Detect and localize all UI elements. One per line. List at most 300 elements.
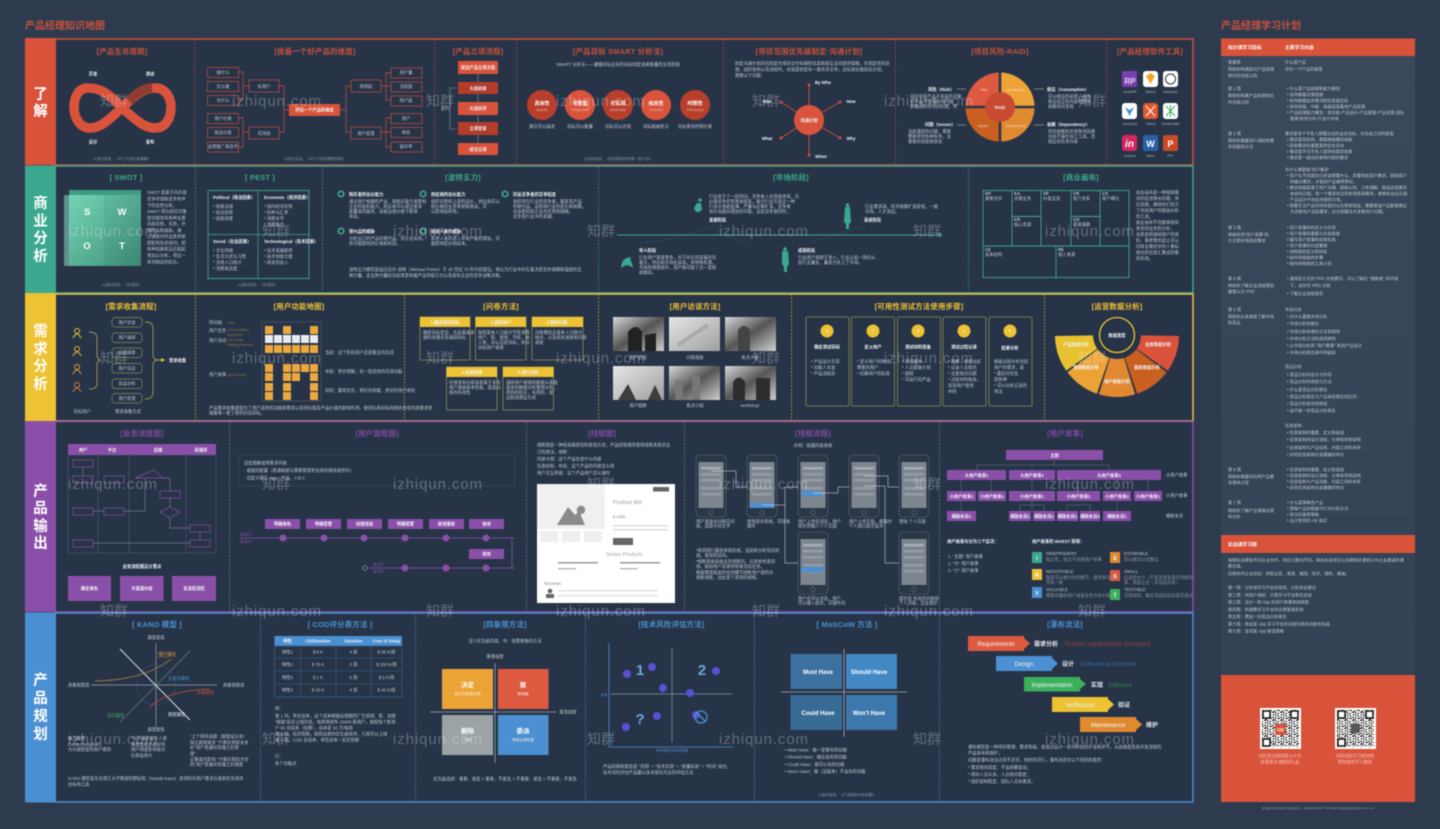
icons: software tools: Mockplus bbox=[1123, 122, 1137, 126]
panel: study plan table: • 信息架构的重要、定义和组成 bbox=[1287, 429, 1344, 436]
cards: usability steps: 2 bbox=[872, 328, 875, 334]
flow: demand collection: 问卷调查 bbox=[118, 349, 136, 356]
tree: user story: 小用户故事 bbox=[1166, 492, 1188, 499]
watermarks: 知群 bbox=[100, 350, 128, 366]
heading: demand collection: [需求收集流程] bbox=[106, 302, 157, 311]
chart: infinity lifecycle bbox=[74, 70, 171, 161]
panel: study plan table: 和分析 bbox=[1228, 513, 1241, 520]
flow: demand collection: 用户调研 bbox=[118, 334, 136, 341]
panel: 产品输出 row: 品 bbox=[33, 501, 48, 517]
diagram: business canvas: 渠道通路 bbox=[1073, 221, 1091, 228]
chart: RAID wheel: Issues bbox=[978, 124, 988, 128]
flow: demand collection: 用户访谈 bbox=[118, 319, 136, 326]
diagram: communication plan: What bbox=[762, 136, 773, 141]
list: five forces: 手段。 bbox=[349, 213, 362, 220]
panel: study plan table: 本质的过程。找一个需求的达到有效提高需求，能够机会在后面 bbox=[1290, 190, 1407, 197]
diagram: user journey: 使用 bbox=[482, 520, 491, 528]
matrix: PEST: * 消费者态度 bbox=[213, 265, 238, 272]
chart: eisenhower quadrant bbox=[430, 638, 577, 782]
table: COD: 行： bbox=[275, 753, 284, 760]
heading: PEST: [ PEST ] bbox=[245, 173, 275, 182]
chart: waterfall: 设计 bbox=[1062, 660, 1074, 668]
watermarks: izhiqun.com bbox=[719, 476, 809, 493]
flow: project setup: 立项答审 bbox=[469, 125, 487, 132]
cards: survey: 1.确定调研目标 bbox=[430, 319, 460, 326]
chart: eisenhower quadrant: 优先级选择：重要、紧急 > 重要、不紧急 > 不重要、紧急 > 不重要、不紧急 bbox=[433, 776, 577, 782]
tree: user story: 小用户故事1 bbox=[1067, 493, 1091, 500]
panel: study plan table: • 竞品分析报告与产品体验报告的区别 bbox=[1287, 393, 1357, 400]
list: five forces: 质量高的服务，或者迫使价格下跌等 bbox=[349, 208, 418, 215]
heading: ops: [运营数据分析] bbox=[1092, 302, 1143, 311]
panel: study plan table: • 市场分析方法的选用原则 bbox=[1287, 335, 1336, 342]
title: study plan: 产品经理学习计划 bbox=[1221, 19, 1301, 32]
chart: user story map: 时间轴 bbox=[209, 319, 222, 326]
heading: scope: [项目范围优先级制定·沟通计划] bbox=[756, 47, 863, 56]
panel: study plan table bbox=[1221, 38, 1415, 676]
chart: waterfall: 实现 bbox=[1091, 681, 1103, 689]
diagram: business canvas: 同样业模式中的人重标 bbox=[1136, 243, 1180, 250]
chart: waterfall: * 组织架构稳定、团队人员有要求。 bbox=[968, 778, 1035, 785]
wireflow phones: 可以输入提示，可操作内 bbox=[798, 600, 845, 606]
panel: 需求分析 row: 求 bbox=[33, 340, 48, 358]
watermarks: izhiqun.com bbox=[232, 603, 322, 620]
panel: study plan table: 第 2 周 bbox=[1228, 130, 1241, 137]
diagram: business flow: 前端序 bbox=[195, 446, 208, 454]
watermarks: 知群 bbox=[262, 223, 290, 239]
chart: eisenhower quadrant: 做 bbox=[520, 680, 527, 689]
heading: market: [市场阶段] bbox=[773, 173, 809, 182]
diagram: business flow: 用户 bbox=[79, 446, 87, 454]
matrix: SWOT: 各种因素相互匹配起 bbox=[147, 246, 186, 252]
chart: market stages: 市场，人才流出。 bbox=[865, 208, 899, 215]
flow: demand collection: 用户反馈 bbox=[118, 395, 136, 402]
table: COD: $ 5 K bbox=[313, 650, 323, 654]
panel: 商业分析 row: 析 bbox=[33, 247, 48, 265]
diagram: business canvas: 待的促进增长的图，用 bbox=[1136, 195, 1179, 202]
cards: survey: 2.选定用户 bbox=[491, 319, 511, 326]
list: five forces: 能影响定价和成本。 bbox=[431, 240, 470, 247]
table: COD: 特性2 bbox=[282, 661, 294, 668]
heading: good product: [做最一个好产品的维度] bbox=[274, 47, 356, 56]
list: five forces bbox=[338, 191, 586, 279]
wireframe card: Product title bbox=[613, 500, 642, 506]
panel: study plan table: • 线框图的定义和特征 bbox=[1287, 248, 1328, 255]
chart: market stages: 成熟阶段 bbox=[798, 247, 816, 254]
chart: SMART circles: 以目标制定、《如何规划你的第一份产品》 bbox=[584, 156, 652, 161]
photos: interview: 问卷调查 bbox=[686, 354, 704, 361]
watermarks: 知群 bbox=[752, 93, 780, 109]
chart: KANO: 魅力属性 bbox=[159, 651, 177, 658]
matrix: SWOT: 以迭代研究、《开发性》 bbox=[102, 282, 142, 287]
matrix: PEST: * 生活方式与习惯 bbox=[213, 253, 247, 260]
chart: MoSCoW: • Won't Have：做（这版本）不会有的功能 bbox=[785, 768, 866, 775]
chart: KANO: 满意度低 bbox=[147, 726, 165, 733]
panel: study plan table: 往期合作企业包括：网易云音、滴滴、美团、知乎、猎豹、美柚。 bbox=[1228, 570, 1349, 577]
panel: study plan table: 产品设计中创出合理的方案。 bbox=[1290, 196, 1344, 203]
table: COD: 2 周 bbox=[350, 662, 357, 668]
diagram: business canvas: 收入来源 bbox=[1058, 251, 1076, 258]
chart: market stages: 行业需求减，经济规模扩张盈低，一般 bbox=[865, 203, 939, 210]
diagram: business canvas: CH bbox=[1073, 217, 1079, 222]
diagram: user journey: 新用户 bbox=[373, 561, 385, 567]
cards: survey: 5.进行分析 bbox=[518, 369, 539, 376]
table: COD: Duration bbox=[345, 638, 363, 644]
matrix: SWOT: 密切相关的各种主要 bbox=[147, 214, 186, 222]
chart: market stages: 些行业量化、量反力优上了市场。 bbox=[798, 259, 862, 266]
flow: project setup: 迭代 bbox=[441, 105, 450, 112]
chart: tech risk: 1 bbox=[636, 662, 644, 679]
diagram: business canvas: VP bbox=[1043, 191, 1049, 196]
wireflow phones: 登陆 个人页面 bbox=[899, 518, 927, 525]
panel: study plan table: 第七周：该项某 App 推送策略 bbox=[1228, 628, 1285, 634]
heading: tools: [产品经理软件工具] bbox=[1117, 47, 1183, 56]
chart: KANO: 满意度越多越好的 bbox=[131, 741, 165, 748]
matrix: SWOT: S bbox=[84, 207, 90, 218]
cards: usability steps: 确定测试目标 bbox=[814, 344, 841, 350]
panel: 产品输出 row: 输 bbox=[33, 517, 48, 535]
flow: project setup bbox=[441, 61, 498, 155]
panel: study plan table: • 市场分析有哪些方法和规则 bbox=[1287, 328, 1340, 335]
chart: RAID wheel: 当前遇到的问题，需要 bbox=[908, 128, 952, 135]
matrix: PEST: * 消费水平 bbox=[264, 215, 285, 222]
panel: 商业分析 row: 商 bbox=[33, 194, 48, 212]
tree: user story: 细致条目4 bbox=[1080, 513, 1100, 520]
chart: SMART circles: SMART 分析法——遵循目标应有的目标制定或者衡量的五项原则 bbox=[556, 61, 680, 68]
chart: user story map: 产品需求收集提取为了用户选择的功能和需求以及团队能及产品价值的影响作用。使团队和目标的相关各项内容需求快 bbox=[209, 404, 433, 412]
tree: user story: 用户故事的 INVEST 原则： bbox=[1032, 538, 1084, 545]
wireframe card: 己的想法。线框： bbox=[537, 448, 571, 456]
watermarks: 知群 bbox=[752, 350, 780, 366]
chart: waterfall: Software architecture bbox=[1080, 662, 1137, 668]
photos: interview: 焦点小组 bbox=[686, 402, 704, 409]
photos: interview: 用户观察 bbox=[629, 402, 647, 409]
panel: study plan table: 知识课学习目标 bbox=[1228, 44, 1262, 51]
watermarks: izhiqun.com bbox=[556, 350, 646, 367]
wireflow phones: 用户直接访问网页内 bbox=[696, 518, 735, 525]
title: knowledge map: 产品经理知识地图 bbox=[25, 19, 105, 32]
diagram: business canvas: 成本结构 bbox=[985, 251, 1003, 258]
wireflow phones bbox=[696, 442, 940, 606]
chart: user story map: Walking Skeleton bbox=[227, 343, 254, 347]
chart: KANO: 缺乏越来越多 "只要好用就多多 bbox=[190, 739, 249, 746]
diagram: good product dimensions: 用户反馈 bbox=[357, 130, 375, 137]
list: five forces: 供应商的议价能力 bbox=[431, 191, 465, 198]
diagram: user journey: 老用户 bbox=[373, 568, 385, 574]
matrix: PEST: * 政治形势 bbox=[213, 209, 234, 216]
diagram: user journey: 明确角色 bbox=[274, 520, 292, 528]
wireframe card: 用户交互界面：这个产品用户怎么操作 bbox=[537, 470, 611, 476]
cards: usability steps: * 最后对优化 bbox=[994, 370, 1019, 377]
diagram: good product dimensions: 留存率 bbox=[400, 143, 413, 150]
diagram: business canvas: 到作用。 bbox=[1136, 255, 1153, 262]
table: COD: 4 周 bbox=[350, 688, 357, 694]
chart: KANO: 魅力属性 bbox=[68, 735, 86, 742]
chart: tech risk: 技术难度/技术成熟度 bbox=[656, 748, 689, 752]
diagram: communication plan: How bbox=[846, 99, 856, 104]
diagram: good product dimensions: 用得起 bbox=[360, 83, 373, 90]
diagram: business canvas: 的工具。 bbox=[1136, 213, 1153, 220]
matrix: PEST: * 技术创新力度 bbox=[264, 253, 293, 260]
panel: study plan table: 第五周：撰出一份竞品分析报告 bbox=[1228, 613, 1287, 620]
table: COD: 第 2 列，延迟周期，按照设想的优先级排序，几周可以上线 bbox=[275, 730, 388, 738]
wireflow phones: 用户上传后浏览，用户 bbox=[798, 518, 841, 525]
panel: study plan table: • 信息架构的设计流程，分单和举例说明 bbox=[1287, 436, 1361, 443]
watermarks: izhiqun.com bbox=[884, 603, 974, 620]
watermarks: 知群 bbox=[100, 603, 128, 619]
chart: KANO: "上个用带成绩（期望成分多） bbox=[190, 733, 247, 740]
diagram: business canvas: R$ bbox=[1058, 247, 1064, 252]
panel: study plan table: • 制作线框图的步骤 bbox=[1287, 254, 1323, 261]
table: COD: Cost of Delay bbox=[373, 638, 401, 644]
tree: user story: 务有一致 bbox=[1046, 579, 1064, 586]
panel: QR footer: 帮你规划学习路径 bbox=[1338, 758, 1373, 766]
chart: waterfall: Software bbox=[1108, 683, 1132, 689]
chart: SMART circles: 时限性 bbox=[687, 100, 703, 107]
panel: study plan table: • 用户故事的重要与全局思维 bbox=[1287, 230, 1340, 237]
tree: user story: 小用户故事1 bbox=[1020, 493, 1045, 500]
cards: survey: 问卷需结合基本人口统计 bbox=[535, 329, 583, 336]
panel: study plan table: 帮助你掌握用户调研和需 bbox=[1228, 137, 1274, 144]
panel: study plan table: • 用户故事的的定义与作用 bbox=[1287, 224, 1336, 231]
matrix: PEST: Social（社会因素） bbox=[213, 238, 251, 245]
tree: user story: SMALL bbox=[1124, 569, 1139, 574]
panel: 产品规划 row bbox=[25, 612, 1193, 802]
chart: eisenhower quadrant: 寻找让他完善 bbox=[512, 737, 534, 742]
wireframe card: Reviews bbox=[544, 581, 562, 586]
chart: tech risk: ? bbox=[635, 711, 645, 728]
panel: study plan table: • 市场分析报告调中到面前 bbox=[1287, 349, 1336, 356]
icons: software tools: Sketch bbox=[1145, 90, 1156, 94]
watermarks: izhiqun.com bbox=[1045, 731, 1135, 748]
panel: study plan table: • 需求挖掘是基于用户沟通、细致认知、人性理解、提出这类需求 bbox=[1287, 184, 1408, 191]
panel: study plan table: • 常见的推荐策略 bbox=[1287, 511, 1320, 518]
chart: waterfall: Product requirements document bbox=[1065, 642, 1151, 648]
panel: 产品规划 row: 规 bbox=[33, 708, 48, 725]
chart: ops fan bbox=[1055, 318, 1179, 397]
heading: tech risk: [技术风险评估方法] bbox=[638, 620, 705, 629]
table: COD: 各个功能点 bbox=[275, 760, 297, 767]
chart: user story map: User Activities bbox=[227, 328, 249, 332]
cards: usability steps: 需要的用户 bbox=[857, 364, 878, 371]
matrix: SWOT: 下的态势分析。 bbox=[147, 202, 177, 209]
cards: usability steps: 结果分析 bbox=[1001, 344, 1019, 352]
chart: RAID wheel: 项目依赖的外部各项因素 bbox=[1048, 128, 1096, 135]
chart: ops fan: 产品数据分析 bbox=[1063, 341, 1090, 348]
cards: survey: 确定目标定位，在此基础关 bbox=[423, 329, 475, 336]
panel: study plan table: • 信息架构与产品功能、内容之间的关系 bbox=[1287, 478, 1361, 485]
table: COD: 特性3 bbox=[282, 674, 294, 681]
chart: waterfall: Implementation bbox=[1031, 683, 1073, 689]
watermarks: 知群 bbox=[587, 731, 615, 747]
watermarks: izhiqun.com bbox=[1045, 223, 1135, 240]
panel: 商业分析 row: 分 bbox=[33, 230, 48, 247]
matrix: SWOT: SWOT 得与研究对象 bbox=[147, 208, 187, 215]
chart: KANO: 记事某的影响 "只要好用的才好 bbox=[190, 756, 249, 763]
panel: study plan table: 大多数用户深层需求，应对很解决大多数用户问题。 bbox=[1290, 208, 1386, 215]
cards: survey: 4.投放回收 bbox=[462, 369, 483, 376]
chart: market stages: 有价也趋向增加的可能，这段竞争激烈时， bbox=[709, 208, 791, 215]
wireflow phones: 线框线框，因此受了适用的线框。 bbox=[696, 574, 760, 581]
cards: usability steps: 5 bbox=[1009, 328, 1012, 334]
heading: user story: [用户故事] bbox=[1047, 429, 1083, 438]
table: COD: 例： bbox=[275, 705, 284, 712]
panel: study plan table: 第 3 周 bbox=[1228, 224, 1241, 231]
chart: market stages: 规模局。 bbox=[639, 269, 656, 276]
panel: 产品规划 row: 产 bbox=[33, 672, 48, 689]
panel: study plan table: 帮助你构建产品经理岗位 bbox=[1228, 92, 1274, 99]
matrix: PEST bbox=[208, 190, 318, 287]
matrix: PEST: * 技术发展趋势 bbox=[264, 247, 293, 254]
diagram: good product dimensions: 商业价值 bbox=[214, 129, 232, 136]
chart: RAID wheel: 可以假设的前提，相关 bbox=[1048, 93, 1092, 100]
diagram: business flow: 平台 bbox=[108, 446, 117, 454]
diagram: communication plan: 沟通计划 bbox=[800, 117, 818, 124]
list: five forces: 种力量，这五种力量综合起来影响着产业的吸引力以及现有企业的竞争战略决策。 bbox=[349, 272, 504, 279]
heading: KANO: [ KANO 模型 ] bbox=[132, 620, 182, 629]
diagram: business flow: 及流程流程 bbox=[183, 585, 205, 592]
tree: user story: TESTABLE bbox=[1124, 587, 1146, 592]
tree: user story: 用户故事可分为三个层次： bbox=[947, 538, 999, 545]
list: five forces: 通过用户规模的产业、和购买能力来影响 bbox=[349, 198, 427, 205]
matrix: PEST: * 当地人口统计 bbox=[213, 259, 242, 266]
chart: tech risk: 产品的限制某些是 "范围" + "技术实现" + "质量标准" + "时间" 组合， bbox=[603, 763, 731, 770]
wireflow phones: 根据需提提高的化的细节线框用户提的分 bbox=[696, 569, 774, 576]
icons: software tools: RP bbox=[1124, 77, 1136, 86]
list: five forces: 波特五力模型是由迈克尔·波特（Michael Porter）于 20 世纪 70 年代初提出。他认为行业中存在着决定竞争规模和强度的五 bbox=[349, 266, 582, 273]
watermarks: izhiqun.com bbox=[68, 476, 158, 493]
diagram: business canvas: 更多的业务的分析， bbox=[1136, 225, 1175, 232]
cards: usability steps: 用户的需求，提 bbox=[994, 364, 1025, 371]
watermarks: izhiqun.com bbox=[884, 350, 974, 367]
diagram: business canvas: 商业画布不仅能够很有 bbox=[1136, 219, 1180, 226]
panel: study plan table: • 制作线框图的工具介绍 bbox=[1287, 260, 1332, 267]
flow: project setup: 大组初评 bbox=[469, 105, 487, 112]
panel: study plan table: • 需求是用性的，需要根据需的调查 bbox=[1287, 136, 1353, 143]
icons: software tools: XMind bbox=[1146, 122, 1155, 126]
diagram: business canvas: CR bbox=[1073, 191, 1080, 196]
panel: study plan table: 求挖掘的方法 bbox=[1228, 143, 1253, 150]
diagram: business canvas: 重要合作 bbox=[985, 195, 1003, 202]
list: five forces: 分析自己的产品的替代品，对企业有利。 bbox=[349, 235, 426, 242]
heading: project setup: [产品立项流程] bbox=[453, 47, 504, 56]
chart: infinity lifecycle: 设计 bbox=[89, 138, 98, 146]
table: COD: $ 40 K/周 bbox=[378, 688, 395, 694]
cards: survey bbox=[420, 317, 587, 410]
watermarks: 知群 bbox=[100, 93, 128, 109]
tree: user story: S bbox=[1113, 574, 1117, 580]
chart: waterfall: Maintenance bbox=[1091, 723, 1126, 729]
cards: survey: 入等，对以自定目标，并分 bbox=[478, 339, 530, 346]
panel: study plan table: 的全面认知 bbox=[1228, 98, 1249, 106]
heading: interview: [用户访谈方法] bbox=[670, 302, 721, 311]
diagram: good product dimensions: 体验 bbox=[402, 129, 411, 136]
diagram: good product dimensions: 可持续 bbox=[258, 130, 271, 137]
watermarks: 知群 bbox=[587, 223, 615, 239]
diagram: user journey: 明确需要 bbox=[397, 520, 415, 528]
cards: usability steps: * 记录人员规范 bbox=[948, 364, 977, 371]
cards: survey: 调查 bbox=[535, 339, 544, 346]
heading: wireflow: [线框流程] bbox=[795, 429, 831, 438]
diagram: communication plan: Who bbox=[762, 99, 772, 104]
diagram: business canvas: KR bbox=[1014, 217, 1021, 222]
cards: survey: 在线发布问卷或者基于发布 bbox=[449, 379, 501, 386]
diagram: business canvas: CS bbox=[1102, 191, 1108, 196]
chart: MoSCoW: Won't Have bbox=[853, 711, 886, 717]
chart: ops fan: 营销数据分析 bbox=[1073, 364, 1100, 371]
panel: study plan table: • 竞品分析的定义与作用 bbox=[1287, 371, 1332, 378]
panel: study plan table: 市场分析 bbox=[1285, 306, 1302, 313]
cards: usability steps: * 过程中的每处， bbox=[948, 376, 981, 383]
chart: SMART circles: 目标可以衡量 bbox=[567, 123, 594, 130]
matrix: SWOT: SWOT 是基于内外部 bbox=[147, 189, 187, 196]
chart: tech risk: 技术风险评估产品最以技术部队内主的评估方法 bbox=[603, 769, 694, 776]
diagram: business canvas: 商业画布是一种规律看 bbox=[1136, 189, 1180, 196]
watermarks: izhiqun.com bbox=[232, 93, 322, 110]
panel: study plan table: 信息架构 bbox=[1285, 422, 1302, 429]
cards: survey: 得到的结论，有用的，提 bbox=[506, 389, 554, 396]
panel: study plan table: 帮助你了解企业流程策划 bbox=[1228, 282, 1274, 289]
list: five forces: 以影响盈利等。 bbox=[431, 208, 461, 215]
heading: wireframe: [线框图] bbox=[588, 429, 616, 438]
tree: user story: 3. "小" 用户故事 bbox=[948, 567, 979, 574]
table: COD: $ 25 K/周 bbox=[378, 650, 395, 656]
chart: waterfall: Verification bbox=[1065, 703, 1095, 709]
table: COD: 4 周 bbox=[350, 650, 357, 656]
chart: RAID wheel: 风险（Risk） bbox=[928, 86, 954, 93]
matrix: PEST: Economic（经济因素） bbox=[264, 194, 310, 201]
diagram: business canvas: KA bbox=[1014, 191, 1020, 196]
wireframe card: 内容大纲：这个产品包含什么内容 bbox=[537, 456, 602, 462]
tree: user story: 主题 bbox=[1050, 452, 1059, 459]
list: five forces: 新进入者的威胁 bbox=[431, 228, 462, 235]
cards: usability steps: * 人员配备计划 bbox=[902, 364, 931, 371]
tree: user story: 需要对最终用户或者业务方有价值 bbox=[1046, 592, 1111, 599]
chart: eisenhower quadrant: 去除 bbox=[464, 737, 471, 742]
table: COD: 5 周 bbox=[350, 675, 357, 681]
heading: MoSCoW: [ MoSCoW 方法 ] bbox=[817, 620, 878, 629]
panel: study plan table: • 什么是竞品分析报告 bbox=[1287, 386, 1327, 393]
chart: SMART circles: 具体性 bbox=[534, 100, 550, 107]
diagram: business canvas: 客户细分 bbox=[1102, 195, 1120, 202]
cards: usability steps: * 招募用户的标准 bbox=[857, 370, 891, 377]
cards: usability steps: * 注意观点问题 bbox=[948, 370, 977, 377]
chart: SMART circles: 目标能被各方 bbox=[643, 123, 670, 130]
panel: 了解 row: 了 bbox=[33, 87, 48, 103]
chart: eisenhower quadrant: 重要程度 bbox=[486, 653, 504, 660]
icons: software tools: OmniGraffle bbox=[1161, 122, 1180, 126]
flow: demand collection: 需求收集方式 bbox=[115, 408, 142, 415]
tree: user story: 应该的大小（不是太复杂及任何规划 bbox=[1124, 574, 1193, 581]
matrix: PEST: Technological（技术因素） bbox=[264, 238, 318, 245]
flow: demand collection: 目标用户 bbox=[73, 408, 91, 415]
panel: study plan table: 第六周：梳出某 App 学习平台的功能列表和功能优先级 bbox=[1228, 620, 1331, 628]
panel: 需求分析 row: 析 bbox=[33, 375, 48, 393]
panel: study plan table: 主要学习内容 bbox=[1285, 44, 1314, 51]
matrix: SWOT: W bbox=[118, 207, 127, 218]
wireframe card bbox=[537, 442, 675, 603]
wireflow phones: 操作 bbox=[747, 522, 756, 530]
flow: project setup: 成功立项 bbox=[469, 146, 487, 153]
tree: user story: 细致条目 bbox=[1166, 512, 1183, 520]
chart: RAID wheel: 影响团队的项目实现，可 bbox=[910, 103, 958, 110]
heading: RAID: [项目风险-RAID] bbox=[971, 47, 1029, 56]
heading: user map: [用户功能地图] bbox=[274, 302, 325, 311]
chart: infinity lifecycle: 以迭代研发、《开工产品生命周期》 bbox=[93, 156, 151, 161]
panel: study plan table: • 战手做一份竞品分析报告 bbox=[1287, 407, 1336, 414]
cards: usability steps: 4 bbox=[963, 328, 966, 334]
chart: SMART circles: 可实现 bbox=[610, 100, 626, 107]
chart: RAID wheel: 依赖项目里程 bbox=[1048, 103, 1074, 110]
